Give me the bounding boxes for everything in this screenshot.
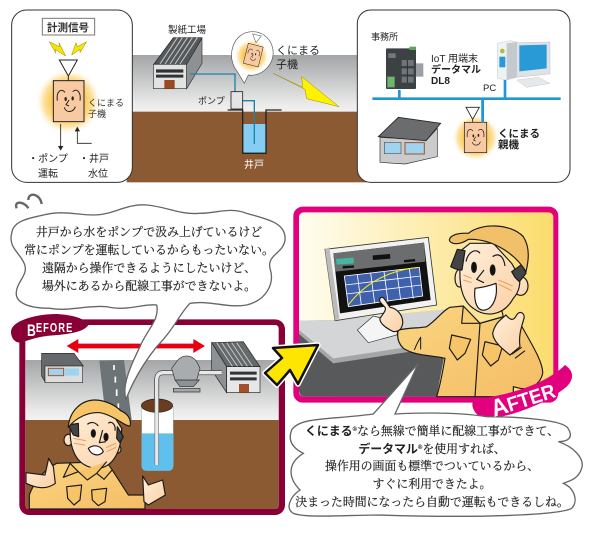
before tag: EFORE (36, 322, 73, 335)
label: well: 井戸 (244, 158, 264, 171)
after speech text: データマル (358, 442, 418, 456)
shop (42, 353, 83, 383)
label: child unit left: 子機 (88, 108, 106, 119)
factory icon (153, 38, 202, 89)
after tag: AFTER (488, 376, 559, 423)
label: child unit balloon: 子機 (276, 58, 298, 71)
pipe (157, 373, 222, 465)
panel: after (289, 207, 582, 516)
keyboard (357, 316, 400, 343)
glow (452, 114, 500, 162)
label: data logger: IoT 用端末 (431, 54, 478, 65)
label: paper factory: 製紙工場 (168, 24, 206, 36)
panel: office (357, 10, 570, 182)
sweat marks (16, 195, 42, 208)
desk (299, 309, 447, 397)
PC (497, 41, 550, 87)
balloon with mascot (232, 32, 273, 83)
well (141, 397, 173, 471)
label: pump operation: 運転 (38, 168, 58, 180)
pump (231, 92, 243, 109)
happy worker (380, 226, 543, 397)
before speech text: 遠隔から操作できるようにしたいけど、 (42, 261, 256, 275)
label: child unit balloon: くにまる (276, 45, 320, 57)
panel: sensor node (12, 10, 132, 182)
after speech text: 決まった時間になったら自動で運転もできるしね。 (295, 495, 569, 509)
signal bolts (49, 42, 87, 56)
label: parent unit: 親機 (498, 138, 519, 151)
house (378, 117, 441, 164)
lightning (273, 73, 339, 107)
pump (172, 356, 200, 392)
top scene: ground and factory (127, 32, 367, 182)
after speech text: 操作用の画面も標準でついているから、 (325, 459, 539, 473)
parent unit mascot (464, 122, 487, 153)
well (228, 110, 282, 153)
after speech text: を使用すれば、 (422, 442, 506, 456)
before tab (11, 314, 89, 343)
label: data logger: データマル (431, 63, 481, 76)
after speech bubble (289, 363, 582, 516)
label: PC: PC (483, 83, 496, 94)
data logger DL8 (386, 47, 423, 89)
label: well level: ・井戸 (79, 154, 109, 165)
label: well level: 水位 (88, 167, 108, 180)
label: parent unit: くにまる (498, 128, 540, 140)
label: pump operation: ・ポンプ (28, 154, 68, 165)
before speech text: 場外にあるから配線工事ができないよ。 (42, 279, 256, 293)
before tag: B (27, 322, 36, 341)
road (99, 360, 132, 420)
mascot glow (35, 68, 102, 135)
speech bubble (11, 205, 285, 399)
signal box (42, 18, 95, 35)
after speech text: くにまる (305, 424, 353, 438)
after speech text: なら無線で簡単に配線工事ができて、 (357, 424, 559, 438)
label: signal: 計測信号 (47, 21, 89, 34)
label: pump: ポンプ (198, 96, 225, 106)
after speech text: ® (353, 426, 358, 433)
after tab (472, 365, 572, 419)
red arrow (67, 339, 205, 353)
pipe (190, 74, 254, 144)
antenna (466, 107, 479, 122)
after speech text: すぐに利用できたよ。 (373, 477, 491, 491)
after speech text: ® (418, 444, 423, 451)
label: data logger: DL8 (431, 76, 450, 87)
mascot (53, 81, 84, 122)
screen chart (344, 267, 423, 307)
antenna (59, 60, 77, 81)
factory (212, 342, 260, 393)
LAN line (372, 80, 561, 122)
before speech text: 常にポンプを運転しているからもったいない。 (24, 243, 274, 257)
arrows (58, 124, 92, 151)
panel: before (11, 195, 285, 515)
before speech text: 井戸から水をポンプで汲み上げているけど (36, 225, 262, 239)
worried worker (26, 400, 165, 509)
label: child unit left: くにまる (88, 98, 124, 108)
label: office: 事務所 (371, 31, 398, 42)
monitor (325, 237, 437, 321)
arrow: before to after (265, 345, 318, 385)
